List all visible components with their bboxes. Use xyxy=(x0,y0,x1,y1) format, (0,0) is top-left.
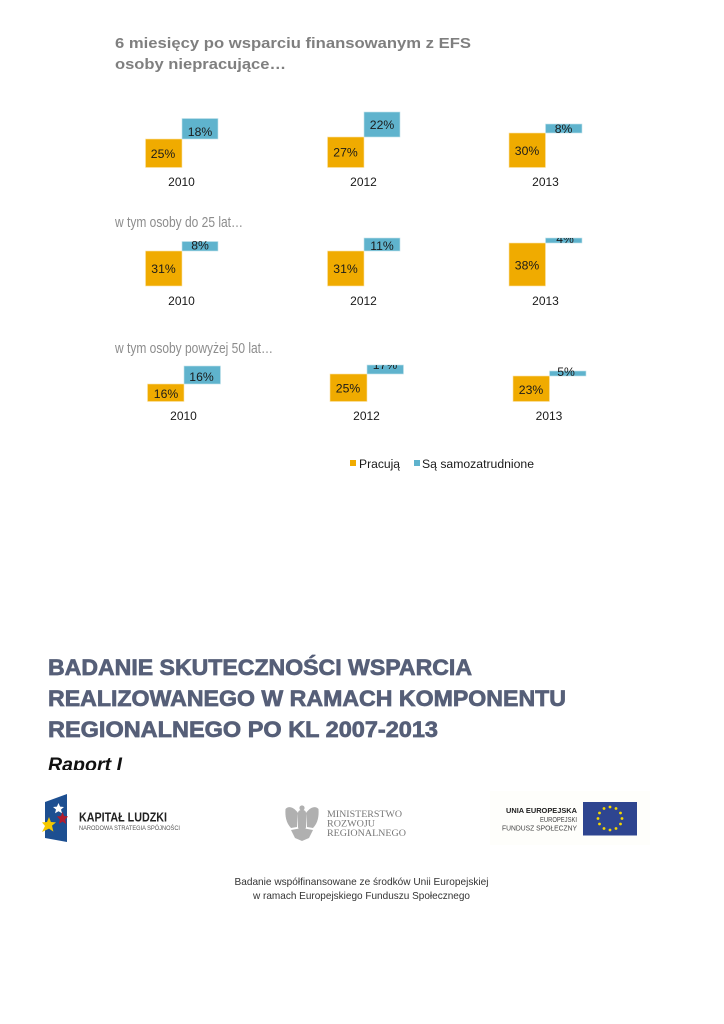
bars 2012 xyxy=(330,364,404,420)
bars 2012: 17% xyxy=(373,358,397,372)
logo: Unia Europejska: EUROPEJSKI xyxy=(540,815,577,824)
title: 6 months after EFS support: osoby niepracujące… xyxy=(115,56,286,73)
logo: Kapitał Ludzki: NARODOWA STRATEGIA SPÓJNOŚCI xyxy=(79,824,180,832)
bars 2012: 11% xyxy=(370,239,394,253)
logo: Ministerstwo Rozwoju Regionalnego xyxy=(285,805,406,841)
bars 2012: 25% xyxy=(336,382,360,396)
bars 2010 xyxy=(148,366,220,423)
bars 2013: 30% xyxy=(515,144,539,158)
report title: REGIONALNEGO PO KL 2007-2013 xyxy=(48,717,438,742)
bars 2013 xyxy=(513,365,586,423)
bars 2013: 5% xyxy=(557,365,575,379)
bars 2010: 16% xyxy=(154,387,178,401)
logo: Ministerstwo Rozwoju Regionalnego: MINISTERSTWO xyxy=(327,810,402,820)
report subtitle: Raport I xyxy=(48,755,123,776)
icon: flag with stars xyxy=(42,794,68,842)
bars 2012 xyxy=(328,112,400,189)
logo: Unia Europejska: FUNDUSZ SPOŁECZNY xyxy=(502,824,577,832)
logo: Ministerstwo Rozwoju Regionalnego: REGIONALNEGO xyxy=(327,829,406,839)
bars 2010: 2010 xyxy=(168,175,195,189)
bars 2010: 25% xyxy=(151,147,175,161)
logo: Ministerstwo Rozwoju Regionalnego: ROZWOJU xyxy=(327,820,375,830)
bars 2010 xyxy=(146,238,218,308)
bars 2012: 27% xyxy=(333,146,358,160)
bars 2013: 8% xyxy=(555,122,572,136)
bars 2010: 2010 xyxy=(170,409,197,423)
bars 2010: 31% xyxy=(151,262,176,276)
bars 2013: 2013 xyxy=(532,175,559,189)
title: 6 months after EFS support xyxy=(115,35,471,73)
footer note: Badanie współfinansowane ze środków Unii Europejskiej xyxy=(234,876,488,888)
bars 2013: 2013 xyxy=(532,294,559,308)
legend: Pracują xyxy=(359,457,400,471)
bars 2010: 18% xyxy=(188,125,212,139)
bars 2010: 8% xyxy=(191,238,209,252)
bars 2013: 2013 xyxy=(536,409,563,423)
logo: Unia Europejska: UNIA EUROPEJSKA xyxy=(506,806,578,815)
bars 2010 xyxy=(146,118,218,189)
logo: Kapitał Ludzki: KAPITAŁ LUDZKI xyxy=(79,810,167,824)
bars 2013 xyxy=(509,232,582,308)
chart row: all persons xyxy=(146,112,582,189)
bars 2012 xyxy=(328,238,400,308)
bars 2012: 31% xyxy=(333,262,358,276)
bars 2012: 2012 xyxy=(353,409,380,423)
bars 2012: 2012 xyxy=(350,294,377,308)
icon: eagle xyxy=(285,805,319,841)
icon: EU flag xyxy=(583,802,637,836)
report title: BADANIE SKUTECZNOŚCI WSPARCIA xyxy=(48,655,472,680)
bars 2010: 16% xyxy=(189,370,214,384)
bars 2010: 2010 xyxy=(168,294,195,308)
bars 2013: 38% xyxy=(515,258,539,272)
footer note: w ramach Europejskiego Funduszu Społecznego xyxy=(252,890,470,902)
chart row: under 25 xyxy=(145,238,582,305)
footer note xyxy=(234,876,488,902)
bars 2012: 2012 xyxy=(350,175,377,189)
subheading: under 25: w tym osoby do 25 lat… xyxy=(114,215,243,231)
logo: Kapitał Ludzki xyxy=(42,794,180,842)
logo: Unia Europejska xyxy=(490,791,650,845)
bars 2013 xyxy=(509,122,582,189)
legend: Są samozatrudnione xyxy=(422,457,534,471)
chart row: over 50 xyxy=(147,364,586,420)
report title: REALIZOWANEGO W RAMACH KOMPONENTU xyxy=(48,686,566,711)
legend xyxy=(350,457,534,471)
title: 6 months after EFS support: 6 miesięcy po wsparciu finansowanym z EFS xyxy=(115,35,471,52)
bars 2012: 22% xyxy=(370,118,394,132)
subheading: over 50: w tym osoby powyżej 50 lat… xyxy=(114,341,273,357)
report title xyxy=(48,655,566,742)
bars 2013: 23% xyxy=(519,383,543,397)
bars 2013: 4% xyxy=(556,232,574,246)
